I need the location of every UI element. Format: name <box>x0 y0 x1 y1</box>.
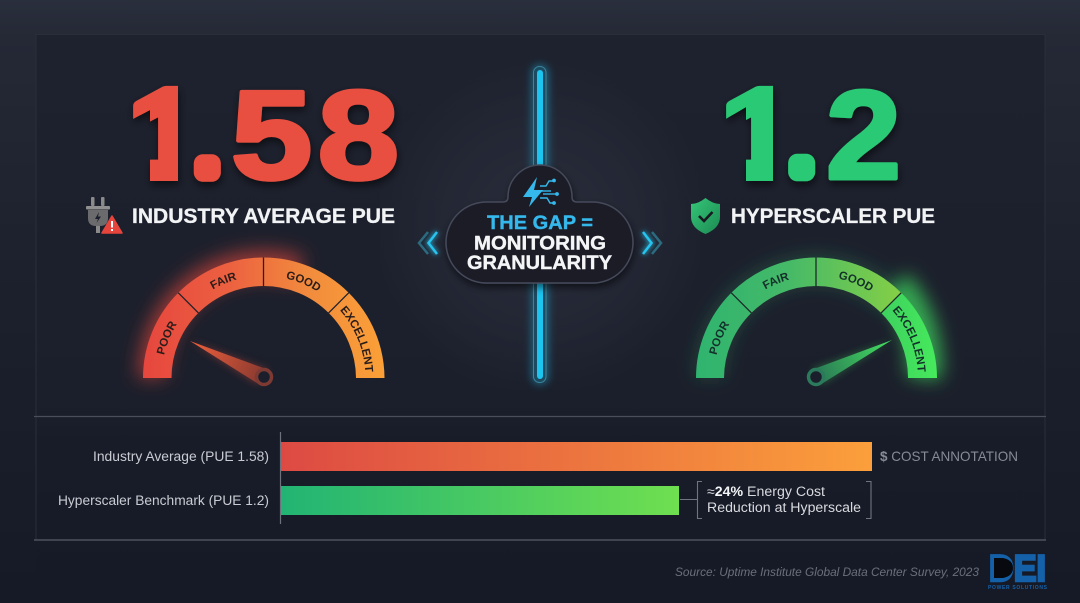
gauge arc segments <box>143 258 384 378</box>
needle glow <box>190 341 268 384</box>
icon: shield check <box>691 198 720 234</box>
gauge labels: EXCELLENT <box>340 306 374 372</box>
label: industry average: Industry Average (PUE 1.58) <box>93 449 269 464</box>
big number: 1.2: . <box>793 118 810 185</box>
big number: 1.2: 2 <box>826 65 901 206</box>
center divider line <box>531 64 549 385</box>
icon: plug with warning <box>86 197 122 233</box>
needle hub <box>256 370 272 384</box>
arrow: left chevrons <box>419 232 437 254</box>
needle <box>190 341 266 383</box>
needle hub <box>808 370 824 384</box>
needle glow <box>812 340 892 384</box>
callout: the gap: MONITORING <box>474 232 606 254</box>
gauge: hyperscaler <box>690 249 954 392</box>
callout text: THE GAP = <box>487 212 593 234</box>
logo: DEI: POWER SOLUTIONS <box>988 585 1048 591</box>
gauge labels: FAIR <box>210 272 237 290</box>
big number: 1.58: 58 <box>231 64 404 205</box>
gauge glow <box>895 285 925 378</box>
source: Source: Uptime Institute Global Data Center Survey, 2023 <box>675 567 980 579</box>
big number: 1.58 <box>132 86 400 187</box>
axis <box>280 432 282 524</box>
divider <box>34 416 1046 418</box>
needle <box>814 340 892 383</box>
callout shape <box>446 165 633 283</box>
icon: lightning circuit <box>523 177 559 207</box>
big number: 1.58: . <box>199 118 216 186</box>
gauge dividers <box>731 258 901 313</box>
callout: energy cost reduction: Reduction at Hyperscale <box>707 500 861 515</box>
gauge labels <box>156 272 374 372</box>
gauge labels: GOOD <box>839 272 873 290</box>
logo: DEI: DEI <box>989 548 1046 589</box>
gauge: industry average <box>126 237 384 390</box>
divider <box>34 539 1046 541</box>
callout: the gap: GRANULARITY <box>467 252 612 274</box>
bar: industry average <box>281 442 872 471</box>
gauge labels <box>709 272 926 372</box>
callout: energy cost reduction <box>680 482 871 518</box>
heading: hyperscaler PUE: HYPERSCALER PUE <box>731 204 935 228</box>
gauge arc segments <box>696 258 901 378</box>
label: hyperscaler: Hyperscaler Benchmark (PUE 1.2) <box>58 493 269 508</box>
bar: hyperscaler <box>281 486 679 515</box>
gauge labels: EXCELLENT <box>892 306 926 372</box>
gauge labels: FAIR <box>762 272 790 289</box>
big number: 1.2: 1 <box>723 65 807 206</box>
gauge excellent segment <box>881 293 937 378</box>
gauge glow <box>152 264 300 378</box>
heading: industry average PUE: INDUSTRY AVERAGE PUE <box>132 204 395 228</box>
bar chart <box>58 432 1018 524</box>
big number: 1.2 <box>726 86 900 187</box>
gauge labels: GOOD <box>286 272 320 290</box>
big number: 1.58: 1 <box>130 65 214 206</box>
cost annotation: $ COST ANNOTATION <box>880 448 1018 464</box>
gauge dividers <box>178 258 349 313</box>
gauge labels: POOR <box>156 321 177 354</box>
callout: the gap <box>446 165 633 283</box>
callout: energy cost reduction: ≈24% Energy Cost <box>707 484 825 499</box>
gauge labels: POOR <box>709 321 730 354</box>
arrow: right chevrons <box>643 232 661 254</box>
